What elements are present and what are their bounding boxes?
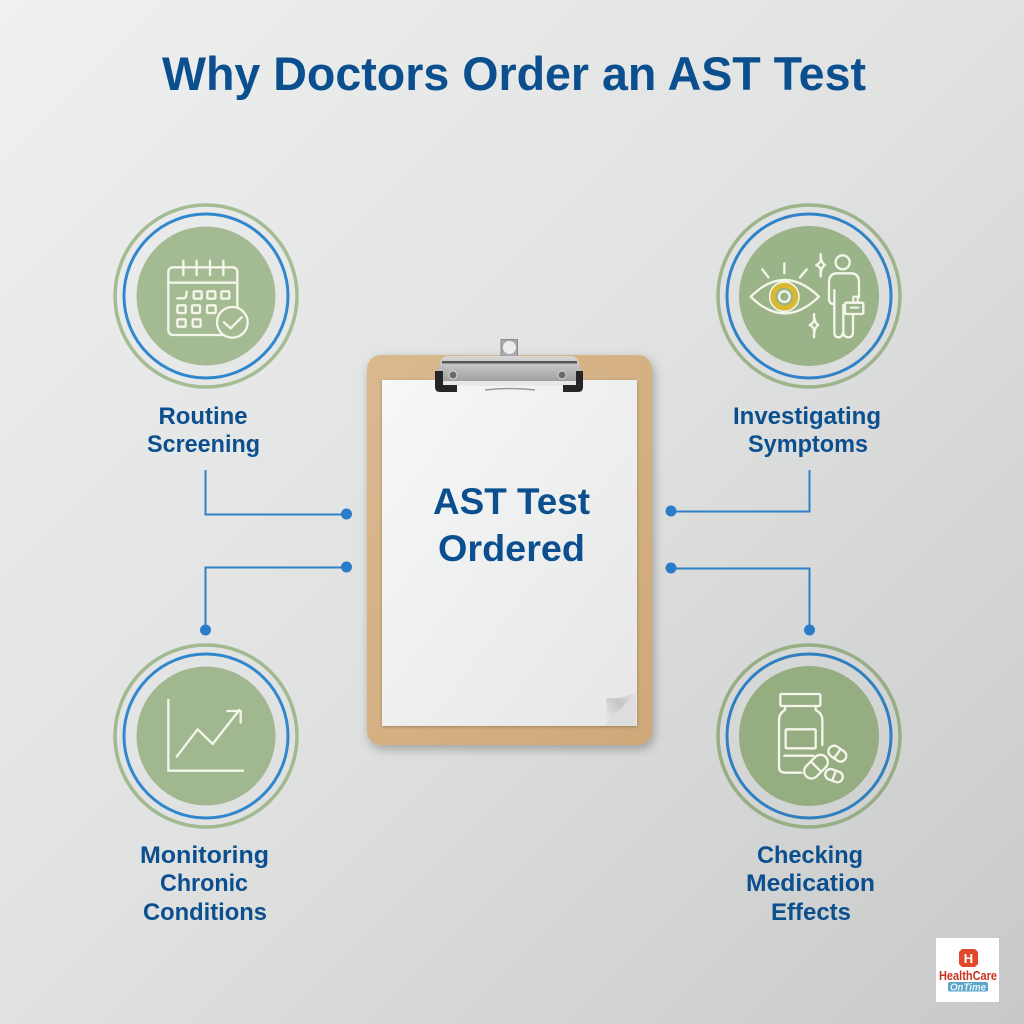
connector: routine screening to clipboard xyxy=(206,470,352,520)
logo: HealthCare OnTime xyxy=(936,938,999,1002)
icon: medicine bottle and pills xyxy=(779,694,849,784)
panel: routine screening badge xyxy=(115,205,297,387)
center text: Ordered xyxy=(438,528,585,569)
logo: HealthCare OnTime: H xyxy=(964,951,973,966)
center text: AST Test xyxy=(433,481,590,522)
label: checking medication effects xyxy=(746,842,875,926)
connector: checking medication effects to clipboard xyxy=(666,562,815,636)
icon: rising line chart xyxy=(168,699,244,771)
label: checking medication effects: Checking xyxy=(757,842,863,869)
label: monitoring chronic conditions xyxy=(140,842,269,926)
connector: monitoring chronic conditions to clipboard xyxy=(200,562,352,636)
label: investigating symptoms xyxy=(733,403,881,458)
logo: HealthCare OnTime: HealthCare xyxy=(939,969,997,983)
label: checking medication effects: Effects xyxy=(771,899,851,926)
panel: checking medication effects badge xyxy=(718,645,900,827)
metal clip xyxy=(435,340,583,392)
label: checking medication effects: Medication xyxy=(746,870,875,897)
clipboard board xyxy=(367,355,652,745)
page curl xyxy=(604,692,636,726)
label: routine screening: Routine xyxy=(158,403,248,430)
paper sheet xyxy=(382,380,637,726)
label: investigating symptoms: Investigating xyxy=(733,403,881,430)
logo: HealthCare OnTime: OnTime xyxy=(950,982,986,994)
label: monitoring chronic conditions: Chronic xyxy=(160,870,248,897)
label: monitoring chronic conditions: Conditions xyxy=(143,899,267,926)
center text xyxy=(433,481,590,569)
label: monitoring chronic conditions: Monitoring xyxy=(140,842,269,869)
panel: investigating symptoms badge xyxy=(718,205,900,387)
panel: clipboard xyxy=(367,340,652,745)
panel: monitoring chronic conditions badge xyxy=(115,645,297,827)
icon: eye and person xyxy=(751,254,863,337)
label: routine screening xyxy=(147,403,260,458)
icon: calendar with check xyxy=(168,261,248,338)
label: routine screening: Screening xyxy=(147,431,260,458)
title: Why Doctors Order an AST Test xyxy=(162,47,866,100)
label: investigating symptoms: Symptoms xyxy=(748,431,868,458)
connector: investigating symptoms to clipboard xyxy=(666,470,810,516)
